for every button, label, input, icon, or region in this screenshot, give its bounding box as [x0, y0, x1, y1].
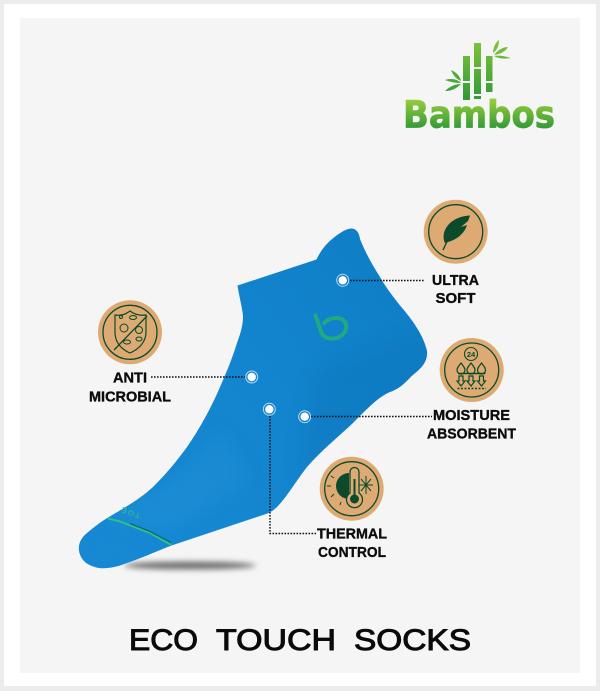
icon: bamboo stalks: [445, 40, 510, 100]
callout: thermal control: [317, 457, 387, 561]
title: ECO: [129, 624, 198, 657]
sock shadow: [124, 562, 256, 570]
title: SOCKS: [354, 624, 471, 657]
label: THERMAL: [317, 526, 387, 542]
icon: moisture drops: 24: [467, 350, 476, 359]
icon: feather: [424, 200, 488, 264]
label: ABSORBENT: [427, 426, 516, 442]
label: MOISTURE: [433, 407, 510, 424]
callout: moisture absorbent: [427, 338, 516, 442]
leader lines: [151, 280, 432, 534]
icon: shield with microbes: [98, 300, 162, 364]
label: MICROBIAL: [89, 388, 171, 406]
callout: anti microbial: [89, 300, 171, 406]
label: ULTRA: [432, 272, 479, 289]
wordmark: Bambos: [403, 94, 555, 136]
logo: Bambos: [403, 40, 555, 136]
icon: sock brand mark: [316, 316, 346, 339]
callout: ultra soft: [424, 200, 488, 307]
label: ANTI: [113, 370, 147, 386]
icon: thermometer sun snow: [320, 457, 384, 521]
toe seam stripe: [108, 518, 172, 545]
label: CONTROL: [318, 544, 386, 561]
toe text: TOE: [119, 505, 141, 520]
label: SOFT: [436, 290, 476, 307]
callout dots: [246, 274, 349, 423]
title: TOUCH: [216, 624, 336, 657]
sock illustration: [70, 220, 440, 575]
